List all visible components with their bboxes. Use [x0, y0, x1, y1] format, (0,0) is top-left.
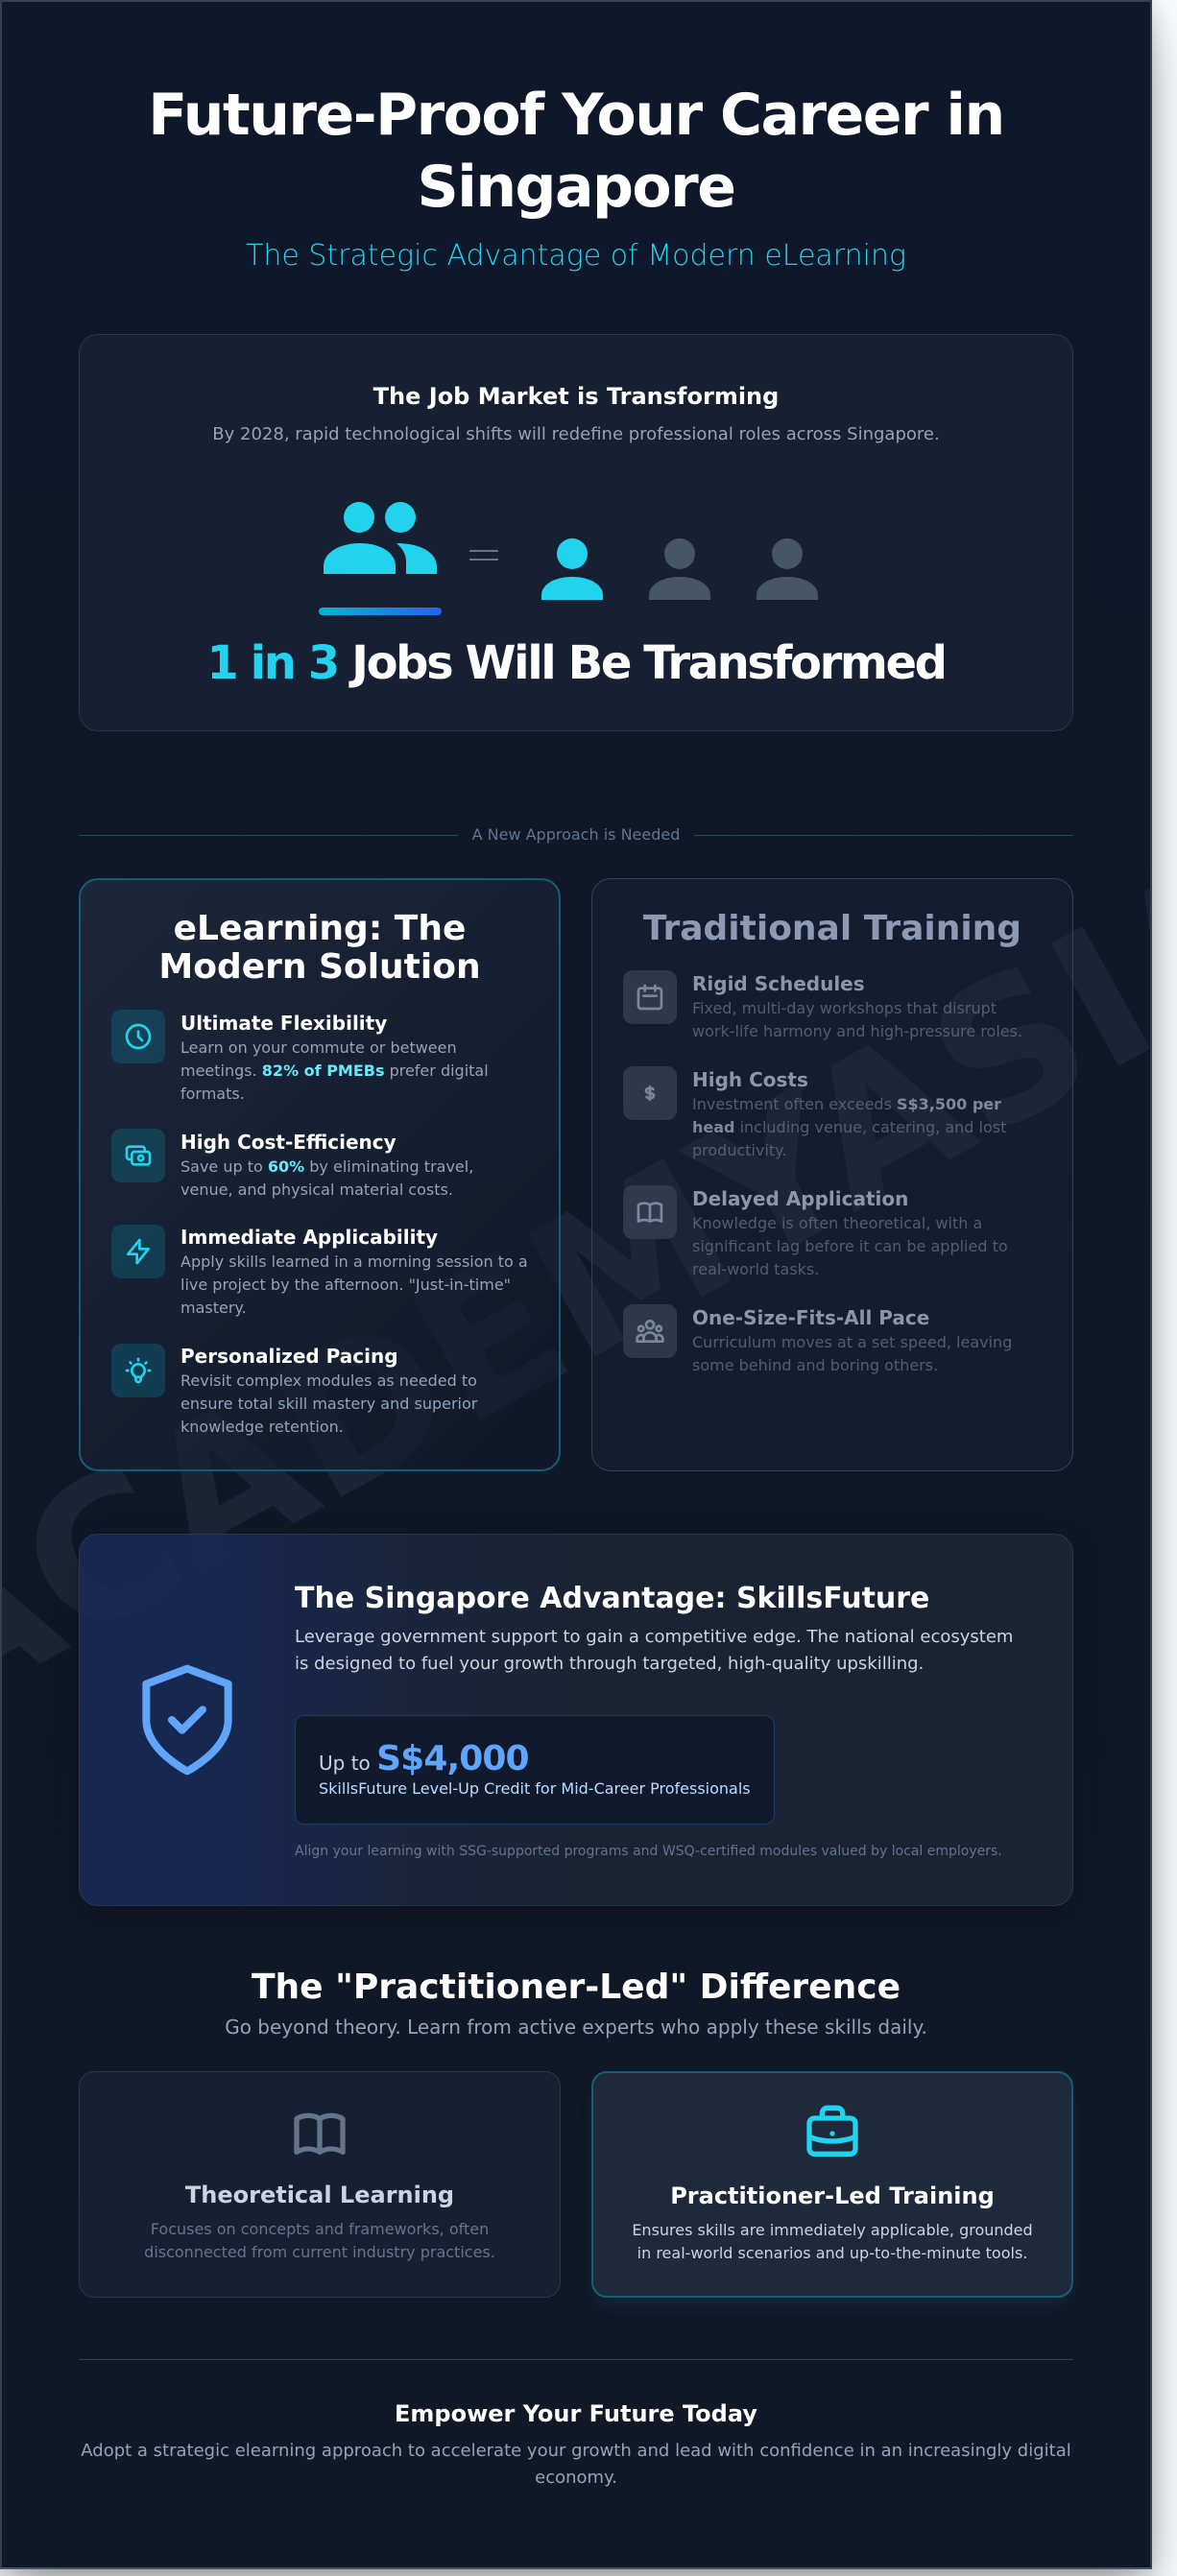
panel: job market: [79, 334, 1073, 731]
icon: lightbulb: [111, 1344, 165, 1397]
icon: person grey: [649, 538, 710, 600]
icon: dollar: [623, 1066, 677, 1120]
feature: pace: One-Size-Fits-All Pace: [692, 1306, 929, 1329]
feature: cost: High Cost-Efficiency: [180, 1131, 396, 1154]
title: [148, 82, 1004, 221]
card text: [632, 2221, 1033, 2262]
feature: applicability: Immediate Applicability: [180, 1226, 438, 1249]
feature: pacing: ensure total skill mastery and superior: [180, 1395, 477, 1413]
feature: costs: High Costs: [692, 1068, 808, 1091]
feature: delayed: [623, 1185, 1008, 1278]
feature: cost: [111, 1129, 473, 1199]
feature: pace: some behind and boring others.: [692, 1356, 938, 1374]
feature: costs: [623, 1066, 1006, 1159]
subheading: Go beyond theory. Learn from active experts who apply these skills daily.: [225, 2015, 927, 2039]
footer divider: [79, 2359, 1073, 2360]
panel: SkillsFuture: [79, 1534, 1073, 1906]
feature: schedules: work-life harmony and high-pressure roles.: [692, 1022, 1022, 1040]
feature: delayed: Delayed Application: [692, 1187, 908, 1210]
heading: The Singapore Advantage: SkillsFuture: [295, 1582, 929, 1615]
feature: pacing: [111, 1344, 478, 1436]
feature: flexibility: Learn on your commute or between: [180, 1038, 457, 1057]
card title: Theoretical Learning: [185, 2182, 454, 2208]
feature: schedules: Rigid Schedules: [692, 972, 865, 995]
underline bar: [319, 608, 442, 615]
feature: pace: [623, 1304, 1012, 1374]
icon: calendar: [623, 970, 677, 1024]
feature: pacing: Personalized Pacing: [180, 1345, 398, 1368]
card text: in real-world scenarios and up-to-the-minute tools.: [637, 2244, 1027, 2262]
icon: lightning: [111, 1225, 165, 1278]
amount: Up to S$4,000: [319, 1739, 529, 1778]
icon: clock: [111, 1010, 165, 1063]
feature: applicability: live project by the afternoon. "Just-in-time": [180, 1276, 511, 1294]
panel: eLearning: formats.: [180, 1085, 245, 1103]
icon: group of people: [324, 502, 437, 574]
credit caption: SkillsFuture Level-Up Credit for Mid-Career Professionals: [319, 1779, 751, 1798]
description: is designed to fuel your growth through targeted, high-quality upskilling.: [295, 1654, 924, 1674]
description: [295, 1627, 1013, 1674]
card text: [144, 2220, 495, 2261]
feature: pacing: knowledge retention.: [180, 1418, 344, 1436]
divider: new approach: [79, 835, 458, 836]
heading: eLearning: The: [174, 909, 466, 948]
heading: The Job Market is Transforming: [373, 383, 779, 410]
icon: shield check: [142, 1664, 232, 1776]
credit box: [295, 1715, 775, 1825]
description: Leverage government support to gain a competitive edge. The national ecosystem: [295, 1627, 1013, 1647]
statistic headline: 1 in 3 Jobs Will Be Transformed: [206, 636, 946, 690]
icon: person highlighted: [541, 538, 603, 600]
panel: eLearning: meetings. 82% of PMEBs prefer digital: [180, 1061, 489, 1080]
feature: flexibility: [111, 1010, 489, 1103]
footer text: [81, 2441, 1071, 2488]
card title: Practitioner-Led Training: [670, 2182, 995, 2209]
heading: Traditional Training: [643, 909, 1021, 948]
feature: costs: Investment often exceeds S$3,500 per: [692, 1095, 1001, 1113]
feature: applicability: [111, 1225, 528, 1317]
feature: costs: productivity.: [692, 1141, 786, 1159]
card text: Focuses on concepts and frameworks, often: [151, 2220, 489, 2238]
icon: group: [623, 1304, 677, 1358]
feature: pace: Curriculum moves at a set speed, leaving: [692, 1333, 1012, 1351]
heading: practitioner-led: The "Practitioner-Led" Difference: [252, 1968, 901, 2007]
footer text: economy.: [535, 2468, 617, 2488]
title: Future-Proof Your Career in: [148, 82, 1004, 149]
divider label: A New Approach is Needed: [472, 825, 680, 844]
heading: [158, 909, 481, 987]
panel: traditional: [591, 878, 1073, 1471]
card text: disconnected from current industry practices.: [144, 2243, 495, 2261]
icon: book: [623, 1185, 677, 1239]
feature: applicability: mastery.: [180, 1299, 247, 1317]
icon: book: [294, 2113, 346, 2155]
footer text: Adopt a strategic elearning approach to accelerate your growth and lead with confidence in an increasingly digital: [81, 2441, 1071, 2461]
card: practitioner-led: [591, 2071, 1073, 2298]
feature: costs: head including venue, catering, and lost: [692, 1118, 1006, 1136]
feature: applicability: Apply skills learned in a morning session to a: [180, 1252, 528, 1271]
feature: schedules: [623, 970, 1022, 1040]
panel: eLearning: [79, 878, 561, 1471]
note: Align your learning with SSG-supported programs and WSQ-certified modules valued by local employers.: [295, 1844, 1002, 1859]
feature: delayed: real-world tasks.: [692, 1260, 819, 1278]
feature: pacing: Revisit complex modules as needed to: [180, 1371, 477, 1390]
panel: eLearning: venue, and physical material costs.: [180, 1181, 453, 1199]
icon: cash: [111, 1129, 165, 1182]
feature: flexibility: Ultimate Flexibility: [180, 1012, 387, 1035]
heading: Modern Solution: [158, 947, 481, 987]
card: theoretical: [79, 2071, 561, 2298]
title: Singapore: [418, 154, 734, 221]
icon: briefcase: [806, 2106, 858, 2157]
feature: delayed: Knowledge is often theoretical, with a: [692, 1214, 982, 1232]
equals sign: [469, 550, 498, 561]
description: By 2028, rapid technological shifts will redefine professional roles across Singapore.: [212, 424, 940, 444]
feature: schedules: Fixed, multi-day workshops that disrupt: [692, 999, 997, 1017]
card text: Ensures skills are immediately applicable, grounded: [632, 2221, 1033, 2239]
icon: person grey: [757, 538, 818, 600]
chart: 1 in 3 people icons: [319, 502, 818, 615]
feature: delayed: significant lag before it can be applied to: [692, 1237, 1008, 1255]
feature: cost: Save up to 60% by eliminating travel,: [180, 1157, 473, 1176]
footer heading: Empower Your Future Today: [395, 2400, 757, 2427]
subtitle: The Strategic Advantage of Modern eLearning: [246, 239, 906, 273]
